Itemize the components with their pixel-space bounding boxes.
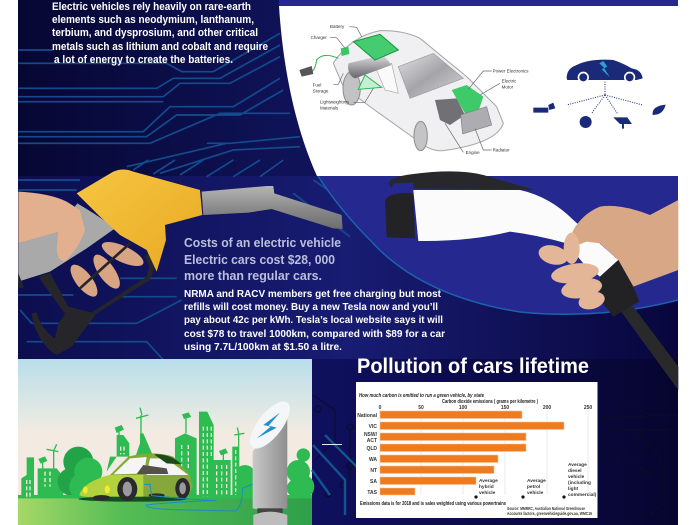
average markers — [474, 495, 566, 499]
icon: electric car — [567, 60, 643, 83]
charging cable — [144, 483, 257, 511]
charging post — [243, 395, 297, 525]
axis labels: 150 — [501, 405, 509, 411]
intro text: elements such as neodymium, lanthanum, — [52, 14, 254, 26]
source — [507, 506, 592, 516]
costs body text: cost $78 to travel 1000km, compared with $89 for a car — [184, 328, 445, 340]
electric car — [78, 453, 193, 502]
dark circuit decoration — [313, 395, 678, 515]
top blue strip — [279, 0, 678, 7]
pollution heading: Pollution of cars lifetime — [357, 354, 589, 378]
average notes: diesel — [568, 468, 582, 474]
axis labels: 100 — [459, 405, 467, 411]
source: Accounts factors, greenvehicleguide.gov.au, WMC15 — [507, 511, 592, 516]
average notes: vehicle — [527, 490, 544, 496]
average notes: Average — [527, 478, 546, 484]
component labels — [311, 24, 529, 155]
intro text — [52, 1, 268, 66]
fuel pump photo — [18, 169, 343, 355]
state labels: VIC — [369, 424, 377, 430]
panel: car components — [279, 6, 678, 176]
component labels: Motor — [502, 85, 514, 90]
intro text: terbium, and dysprosium, and other critical — [52, 27, 258, 39]
chart title: How much carbon is emitted to run a green vehicle, by state — [359, 393, 484, 399]
component labels: Radiator — [493, 148, 510, 153]
component labels: Fuel — [313, 82, 321, 87]
costs body text: refills will cost money. Buy a new Tesla now and you’ll — [184, 301, 438, 313]
state labels: ACT — [367, 438, 377, 444]
axis labels — [379, 405, 592, 411]
costs body text: NRMA and RACV members get free charging but most — [184, 288, 441, 300]
state labels: QLD — [366, 446, 377, 452]
chart notes: Emissions data is for 2018 and is sales weighted using various powertrains — [360, 501, 506, 507]
charging plug photo — [385, 171, 678, 390]
costs body text: pay about 42c per kWh. Tesla’s local website says it will — [184, 314, 443, 326]
state labels: NT — [370, 468, 377, 474]
illustration: green city and electric car — [18, 359, 314, 525]
average notes: light — [568, 486, 579, 492]
icon: leaf — [653, 105, 666, 115]
average notes: hybrid — [479, 484, 494, 490]
icon: solar panel — [613, 117, 632, 129]
axis labels: 50 — [418, 405, 424, 411]
costs body text — [184, 288, 445, 353]
state labels: WA — [369, 457, 377, 463]
intro text: Electric vehicles rely heavily on rare-earth — [52, 1, 251, 13]
intro text: a lot of energy to create the batteries. — [54, 54, 233, 66]
component labels: Electric — [502, 79, 517, 84]
panel: emissions bar chart — [356, 382, 598, 518]
costs body text: using 7.7L/100km at $1.50 a litre. — [184, 341, 342, 353]
state labels — [357, 413, 378, 496]
component labels: Materials — [320, 106, 339, 111]
grid lines — [380, 410, 588, 495]
source: Source: MMRRC, Australian National Greenhouse — [507, 506, 585, 511]
icon: cloud — [580, 116, 592, 128]
bars — [380, 411, 564, 495]
costs heading: Costs of an electric vehicle — [184, 235, 341, 250]
component labels: Power Electronics — [493, 69, 529, 74]
costs heading: Electric cars cost $28, 000 — [184, 252, 335, 267]
blue curved band — [318, 176, 678, 314]
car diagram — [299, 24, 666, 155]
state labels: SA — [370, 479, 377, 485]
icon: plug — [533, 103, 555, 113]
costs heading — [184, 235, 341, 283]
average notes: (including — [568, 480, 591, 486]
axis labels: 250 — [584, 405, 592, 411]
average notes: commercial) — [568, 492, 597, 498]
circuit lines — [18, 33, 350, 360]
component labels: Charger — [311, 35, 327, 40]
icon: dotted connectors — [567, 82, 643, 113]
average notes: Average — [479, 478, 498, 484]
state labels: NSW/ — [364, 432, 378, 438]
axis labels: 0 — [379, 405, 382, 411]
average notes: vehicle — [479, 490, 496, 496]
icon: lightning bolt — [257, 413, 280, 438]
intro text: metals such as lithium and cobalt and require — [52, 41, 268, 53]
component labels: Battery — [330, 24, 345, 29]
average notes: petrol — [527, 484, 540, 490]
costs heading: more than regular cars. — [184, 268, 322, 283]
axis labels: 200 — [543, 405, 551, 411]
average notes: Average — [568, 462, 587, 468]
average notes — [479, 462, 597, 498]
state labels: National — [357, 413, 378, 419]
axis title: Carbon dioxide emissions ( grams per kilometre ) — [442, 399, 538, 405]
component labels: Storage — [313, 88, 329, 93]
state labels: TAS — [367, 490, 378, 496]
component labels: Engine — [466, 150, 480, 155]
average notes: vehicle — [568, 474, 585, 480]
component labels: Lightweighting — [320, 100, 349, 105]
green city skyline — [18, 412, 314, 501]
